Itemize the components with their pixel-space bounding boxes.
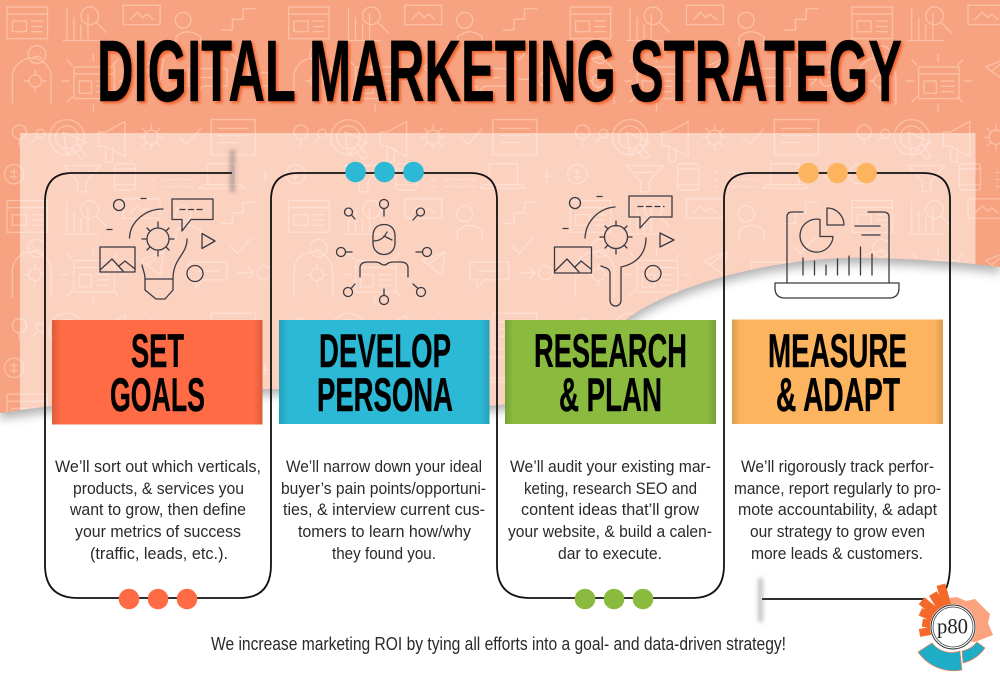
- body text: mote accountability, & adapt: [738, 500, 937, 519]
- body text: We’ll sort out which verticals,: [55, 457, 261, 476]
- card outline: [724, 173, 950, 599]
- dots: [798, 163, 877, 183]
- body text: your website, & build a calen-: [508, 522, 712, 541]
- body text: want to grow, then define: [69, 500, 246, 519]
- logo: p80: [918, 583, 993, 671]
- smudge shadow: [758, 578, 763, 622]
- body text: our strategy to grow even: [750, 522, 925, 541]
- heading: [317, 325, 453, 422]
- colour band: [52, 320, 262, 424]
- footer tagline: We increase marketing ROI by tying all efforts into a goal- and data-driven strategy!: [211, 634, 786, 654]
- body text: your metrics of success: [75, 522, 241, 541]
- heading: RESEARCH: [534, 325, 687, 378]
- logo: p80: p80: [937, 614, 968, 638]
- colour band: [732, 320, 943, 424]
- panel: patterned orange background: [0, 0, 1000, 443]
- body text: buyer’s pain points/opportuni-: [281, 479, 486, 498]
- icon: laptop chart: [775, 208, 899, 298]
- dots: [345, 162, 424, 182]
- colour band: [279, 320, 490, 424]
- icon: light bulb: [100, 198, 215, 299]
- card outline: [45, 173, 271, 598]
- colour band: [505, 320, 716, 424]
- heading: MEASURE: [768, 325, 907, 378]
- dots: [575, 589, 653, 609]
- card outline: [271, 173, 497, 420]
- peach segment: [949, 597, 993, 642]
- heading: & ADAPT: [776, 369, 900, 422]
- soft shadow under the wave edge: [0, 6, 1000, 419]
- body text: (traffic, leads, etc.).: [90, 544, 228, 563]
- body text: keting, research SEO and: [524, 479, 697, 498]
- body text: We’ll narrow down your ideal: [286, 457, 482, 476]
- heading: DEVELOP: [319, 325, 451, 378]
- body text: We’ll rigorously track perfor-: [741, 457, 934, 476]
- badge: [930, 604, 976, 650]
- heading: PERSONA: [317, 369, 453, 422]
- icon: magnifier: [554, 196, 674, 306]
- body text: [55, 457, 261, 563]
- body text: tomers to learn how/why: [298, 522, 471, 541]
- heading: SET: [131, 325, 184, 378]
- panel: develop persona: [271, 162, 497, 563]
- dots: [119, 589, 197, 609]
- body text: [281, 457, 486, 563]
- body text: [508, 457, 712, 563]
- orange rays: [919, 583, 952, 637]
- smudge shadow: [230, 150, 235, 192]
- panel: set goals: [45, 150, 271, 609]
- body text: they found you.: [332, 544, 436, 563]
- body text: content ideas that’ll grow: [521, 500, 700, 519]
- body text: more leads & customers.: [751, 544, 923, 563]
- teal segments: [918, 643, 962, 671]
- panel: translucent light overlay: [20, 133, 976, 410]
- heading: GOALS: [110, 369, 205, 422]
- body text: We’ll audit your existing mar-: [510, 457, 711, 476]
- icon: persona network: [336, 200, 432, 304]
- panel: research and plan: [497, 196, 724, 609]
- heading: [534, 325, 687, 422]
- heading: & PLAN: [559, 369, 662, 422]
- heading: [768, 325, 907, 422]
- body text: ties, & interview current cus-: [283, 500, 485, 519]
- body text: [734, 457, 941, 563]
- heading: [110, 325, 205, 422]
- body text: products, & services you: [73, 479, 244, 498]
- body text: dar to execute.: [558, 544, 662, 563]
- panel: measure and adapt: [724, 163, 950, 622]
- card outline: [497, 420, 724, 598]
- body text: mance, report regularly to pro-: [734, 479, 941, 498]
